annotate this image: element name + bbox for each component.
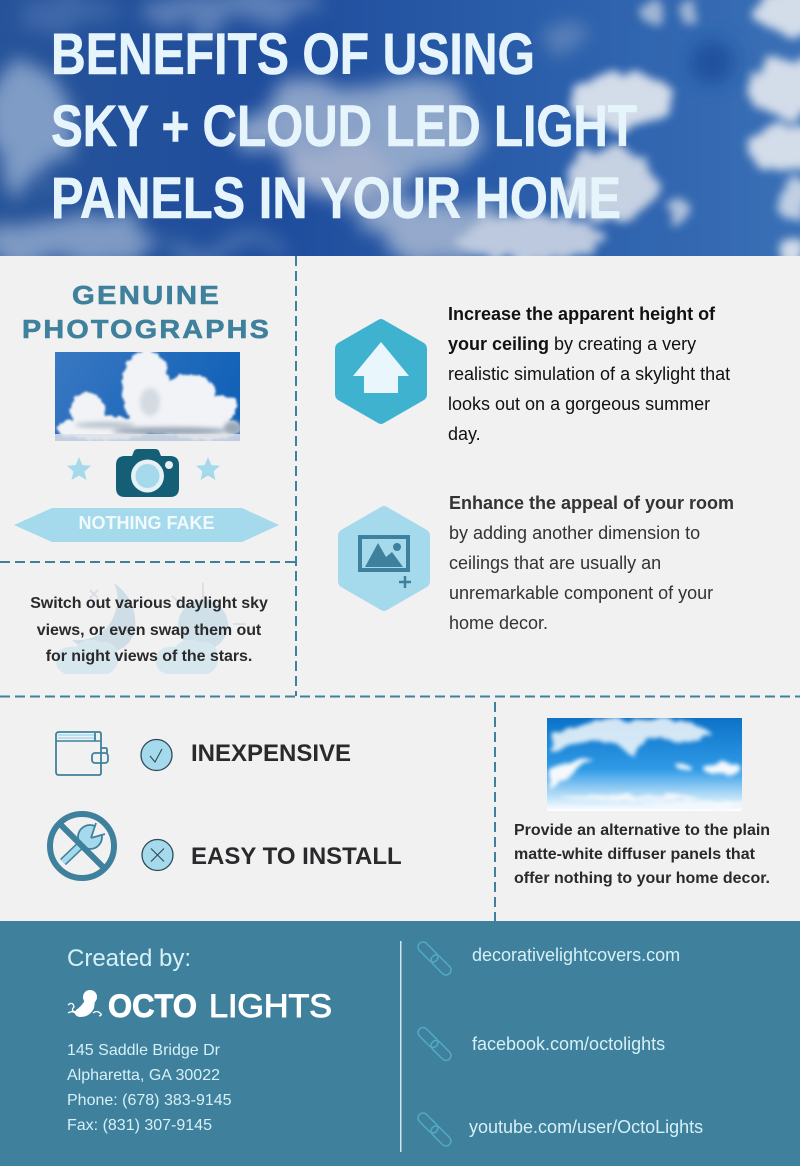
icon: link 3 — [416, 1111, 453, 1148]
text: increase apparent height: Increase the apparent height of — [448, 304, 715, 324]
footer: address: Alpharetta, GA 30022 — [67, 1067, 220, 1084]
text: increase apparent height: realistic simulation of a skylight that — [448, 364, 730, 384]
title: BENEFITS OF USING — [51, 22, 535, 87]
footer: address: Phone: (678) 383-9145 — [67, 1092, 232, 1109]
text: enhance appeal: unremarkable component of your — [449, 583, 713, 603]
wordmark: octo lights: OCTO — [108, 988, 197, 1024]
footer: address: 145 Saddle Bridge Dr — [67, 1042, 220, 1059]
heading: genuine photographs: GENUINE — [72, 280, 221, 310]
text: enhance appeal: home decor. — [449, 613, 548, 633]
footer background — [0, 921, 800, 1166]
title: SKY + CLOUD LED LIGHT — [51, 94, 637, 159]
text: enhance appeal — [449, 493, 734, 633]
footer link: website: decorativelightcovers.com — [472, 945, 680, 965]
text: alternative to diffuser panels: matte-white diffuser panels that — [514, 846, 755, 863]
icon: star right — [196, 457, 220, 480]
heading: genuine photographs: PHOTOGRAPHS — [22, 314, 271, 344]
text: increase apparent height: day. — [448, 424, 481, 444]
icon: star left — [67, 457, 91, 480]
icon: camera — [116, 449, 179, 497]
text: alternative to diffuser panels: offer nothing to your home decor. — [514, 870, 770, 887]
dashed dividers — [0, 256, 800, 921]
text: switch views: for night views of the stars. — [46, 648, 252, 665]
text: alternative to diffuser panels: Provide an alternative to the plain — [514, 822, 770, 839]
title: PANELS IN YOUR HOME — [51, 166, 621, 231]
text: switch views — [30, 595, 268, 665]
icon: cross circle — [142, 840, 173, 870]
banner label: NOTHING FAKE — [78, 513, 214, 533]
icon: checkmark circle — [141, 740, 172, 770]
header sky photo — [0, 0, 800, 265]
label: easy to install: EASY TO INSTALL — [191, 843, 402, 870]
icon: night and day clouds watermark — [56, 583, 246, 674]
icon: wallet — [56, 732, 108, 775]
wordmark: octo lights: LIGHTS — [209, 988, 332, 1024]
icon: octopus logo — [68, 990, 101, 1017]
heading: genuine photographs — [22, 280, 271, 344]
text: enhance appeal: by adding another dimension to — [449, 523, 700, 543]
text: switch views: views, or even swap them out — [37, 622, 261, 638]
label: inexpensive: INEXPENSIVE — [191, 740, 351, 767]
title — [51, 22, 637, 231]
icon: link 2 — [416, 1025, 453, 1063]
footer: created by: Created by: — [67, 945, 191, 972]
icon: crossed-out wrench — [50, 814, 114, 878]
wordmark: octo lights — [108, 988, 332, 1024]
footer link: facebook: facebook.com/octolights — [472, 1034, 665, 1054]
text: alternative to diffuser panels — [514, 822, 770, 887]
footer: address: Fax: (831) 307-9145 — [67, 1117, 212, 1134]
footer link: youtube: youtube.com/user/OctoLights — [469, 1117, 703, 1137]
text: increase apparent height: looks out on a gorgeous summer — [448, 394, 710, 414]
panel image: blue sky with wispy clouds — [547, 718, 760, 811]
panel image: cumulus cloud photo — [55, 350, 242, 441]
banner: nothing fake ribbon — [14, 508, 279, 542]
footer: address — [67, 1042, 232, 1134]
icon: picture hexagon — [338, 506, 430, 611]
icon: link 1 — [416, 940, 453, 977]
icon: up arrow hexagon — [335, 319, 427, 424]
text: increase apparent height: your ceiling by creating a very — [448, 334, 696, 354]
text: switch views: Switch out various daylight sky — [30, 595, 268, 612]
text: enhance appeal: ceilings that are usually an — [449, 553, 661, 573]
footer divider — [400, 941, 402, 1152]
text: increase apparent height — [448, 304, 730, 444]
text: enhance appeal: Enhance the appeal of your room — [449, 493, 734, 513]
